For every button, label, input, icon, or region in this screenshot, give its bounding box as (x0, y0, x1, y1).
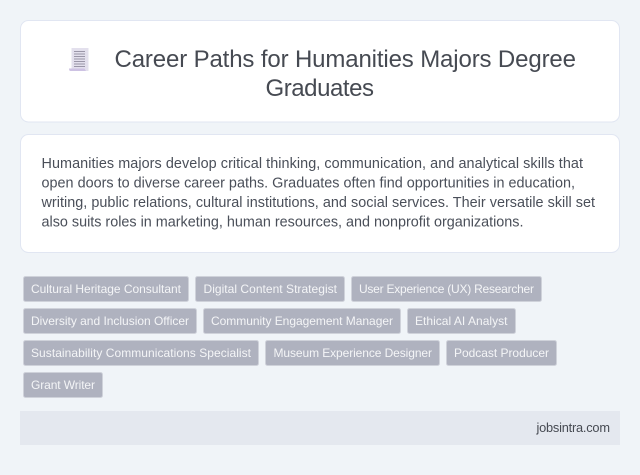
footer (20, 411, 620, 445)
tag: Grant Writer: Grant Writer (31, 378, 95, 392)
text block: description: writing, public relations, cultural institutions, and social services. Their versatile skill set (40, 195, 595, 211)
tag: Sustainability Communications Specialist (24, 340, 258, 366)
career tags (24, 276, 556, 398)
icon: document scroll (69, 48, 88, 71)
text block: description: open doors to diverse career paths. Graduates often find opportunities in education, (42, 176, 575, 192)
tag: Community Engagement Manager: Community Engagement Manager (211, 314, 393, 328)
tag: User Experience (UX) Researcher: User Experience (UX) Researcher (359, 282, 534, 296)
panel: header (20, 20, 620, 122)
tag: Ethical AI Analyst (408, 308, 516, 334)
title: Graduates (266, 75, 374, 102)
tag: Museum Experience Designer: Museum Experience Designer (274, 346, 432, 360)
tag: Community Engagement Manager (204, 308, 400, 334)
text block: description: Humanities majors develop critical thinking, communication, and analytical skills that (42, 156, 583, 172)
tag: Digital Content Strategist: Digital Content Strategist (204, 282, 338, 296)
tag: Museum Experience Designer (266, 340, 440, 366)
tag: Podcast Producer: Podcast Producer (454, 346, 549, 360)
text block: description (40, 156, 595, 230)
tag: Sustainability Communications Specialist: Sustainability Communications Specialist (31, 346, 252, 360)
panel: description (20, 134, 620, 252)
title: Career Paths for Humanities Majors Degree (114, 46, 576, 73)
tag: Diversity and Inclusion Officer: Diversity and Inclusion Officer (31, 314, 189, 328)
tag: Digital Content Strategist (196, 276, 344, 302)
tag: Podcast Producer (446, 340, 556, 366)
title (114, 46, 576, 102)
text block: description: also suits roles in marketing, human resources, and nonprofit organizations. (42, 214, 524, 230)
tag: Ethical AI Analyst: Ethical AI Analyst (415, 314, 508, 328)
tag: Diversity and Inclusion Officer (24, 308, 196, 334)
tag: Cultural Heritage Consultant (24, 276, 188, 302)
tag: Cultural Heritage Consultant: Cultural Heritage Consultant (31, 282, 182, 296)
tag: User Experience (UX) Researcher (352, 276, 542, 302)
footer source text: jobsintra.com (536, 420, 610, 435)
tag: Grant Writer (24, 372, 102, 398)
